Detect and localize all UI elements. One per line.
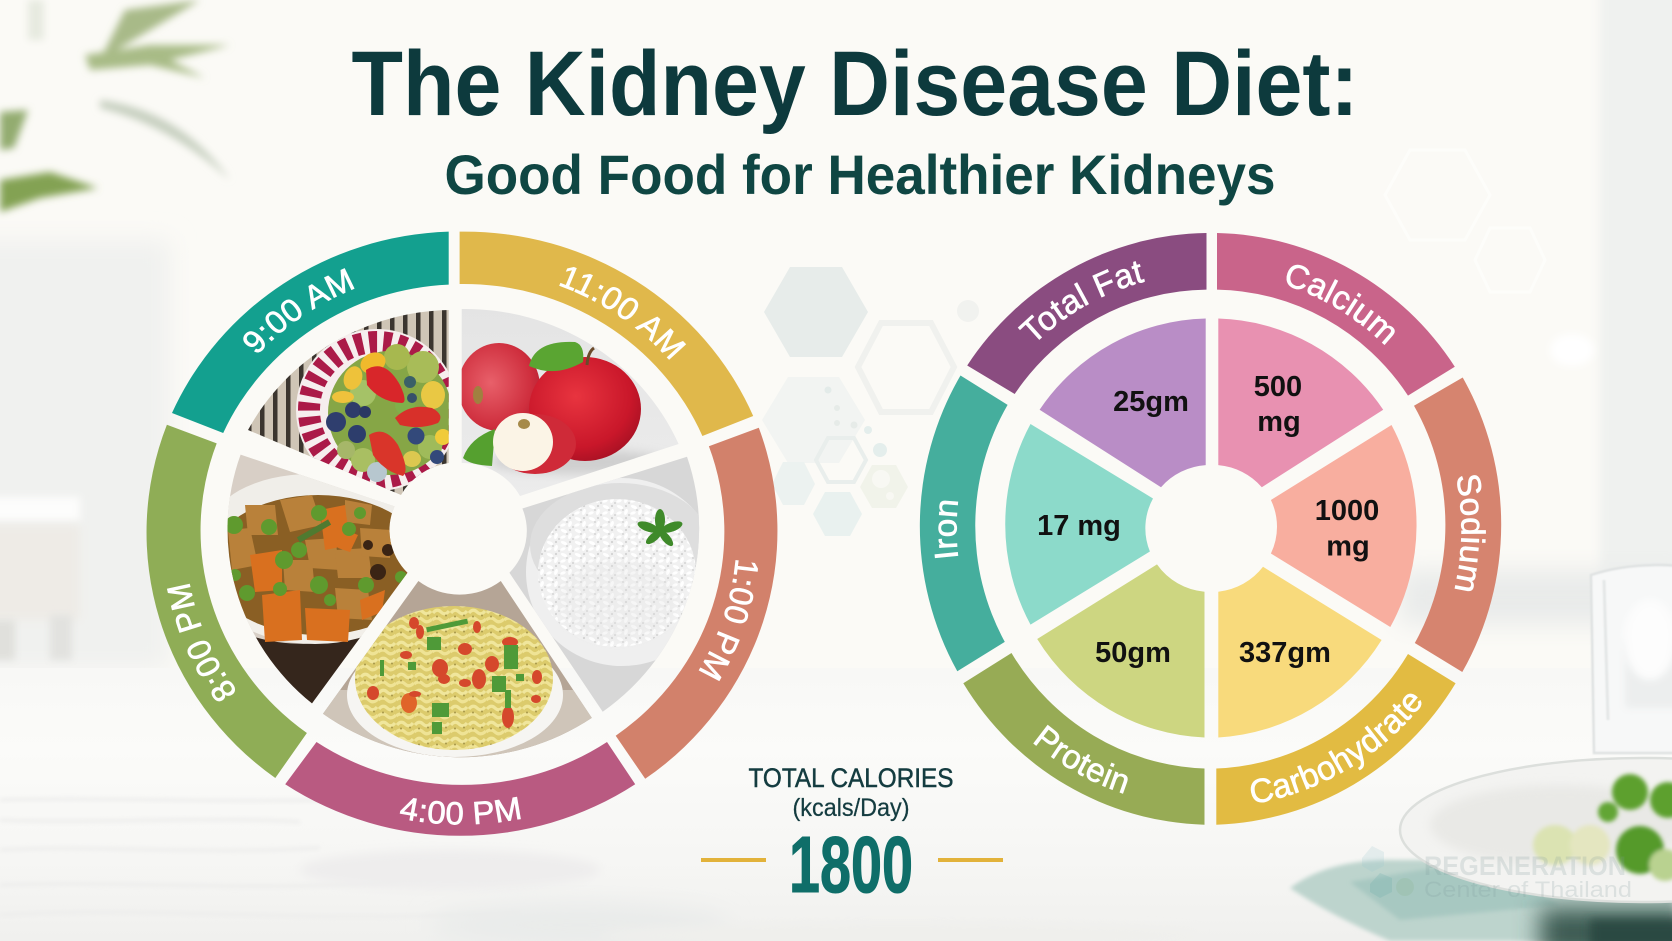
photo: apples	[462, 309, 678, 496]
photo: vegetable curry	[228, 454, 408, 704]
wedge: Protein value	[1037, 564, 1204, 738]
value: 1000 mg: mg	[1326, 530, 1370, 562]
calories value: 1800	[789, 820, 913, 909]
meal timing wheel	[146, 232, 778, 836]
plate and tray	[1290, 758, 1672, 941]
label: 8:00 PM: 8:00 PM	[166, 584, 235, 702]
label: Sodium: Sodium	[1454, 475, 1486, 592]
wedge: Iron value	[1005, 424, 1153, 625]
label: 11:00 AM: 11:00 AM	[559, 267, 686, 360]
segment: 1:00 PM	[616, 428, 777, 779]
value: 17 mg: 17 mg	[1037, 510, 1121, 542]
label: Total Fat: Total Fat	[1018, 261, 1145, 340]
calories heading: TOTAL CALORIES	[748, 763, 954, 793]
right dash	[938, 858, 1003, 862]
calories unit: (kcals/Day)	[792, 794, 910, 822]
label: 1:00 PM: 1:00 PM	[698, 560, 758, 682]
left dash	[701, 858, 766, 862]
label: 9:00 AM: 9:00 AM	[243, 268, 354, 352]
label: 4:00 PM: 4:00 PM	[400, 796, 521, 825]
photo: fruit salad	[248, 310, 449, 495]
ring: Calcium	[1217, 233, 1455, 396]
ring: Iron	[920, 376, 1008, 671]
watermark: REGENERATION	[1424, 851, 1626, 881]
ring: Total Fat	[967, 233, 1206, 394]
watermark: Center of Thailand	[1424, 877, 1632, 902]
value: 50gm: 50gm	[1095, 637, 1171, 669]
title: The Kidney Disease Diet:	[352, 33, 1358, 135]
photo: white rice	[510, 456, 700, 712]
label: Protein: Protein	[1033, 724, 1128, 794]
wedge: Carbohydrate value	[1218, 567, 1382, 738]
wedge: Total Fat value	[1040, 318, 1206, 487]
segment: 11:00 AM	[460, 232, 753, 436]
value: 1000 mg: 1000	[1315, 495, 1379, 527]
value: 25gm: 25gm	[1113, 386, 1189, 418]
label: Carbohydrate: Carbohydrate	[1250, 694, 1422, 802]
ring: Protein	[963, 653, 1204, 825]
ring: Carbohydrate	[1216, 654, 1456, 825]
wedge: Sodium value	[1271, 425, 1417, 627]
background hexagon molecules	[762, 150, 1545, 536]
value: 337gm: 337gm	[1239, 637, 1331, 669]
value: 500 mg: mg	[1257, 406, 1301, 438]
value: 500 mg: 500	[1254, 371, 1302, 403]
glass of water	[1591, 565, 1672, 753]
segment: 4:00 PM	[285, 742, 635, 836]
label: Calcium: Calcium	[1286, 264, 1395, 345]
photo: vegetable rice	[323, 581, 592, 758]
segment: 8:00 PM	[147, 425, 307, 778]
total calories callout	[701, 763, 1003, 909]
label: Iron: Iron	[934, 500, 958, 558]
nutrient wheel	[920, 233, 1502, 825]
wedge: Calcium value	[1218, 318, 1383, 487]
segment: 9:00 AM	[172, 232, 449, 433]
watermark	[1362, 846, 1632, 902]
ring: Sodium	[1414, 378, 1501, 672]
subtitle: Good Food for Healthier Kidneys	[444, 143, 1276, 206]
